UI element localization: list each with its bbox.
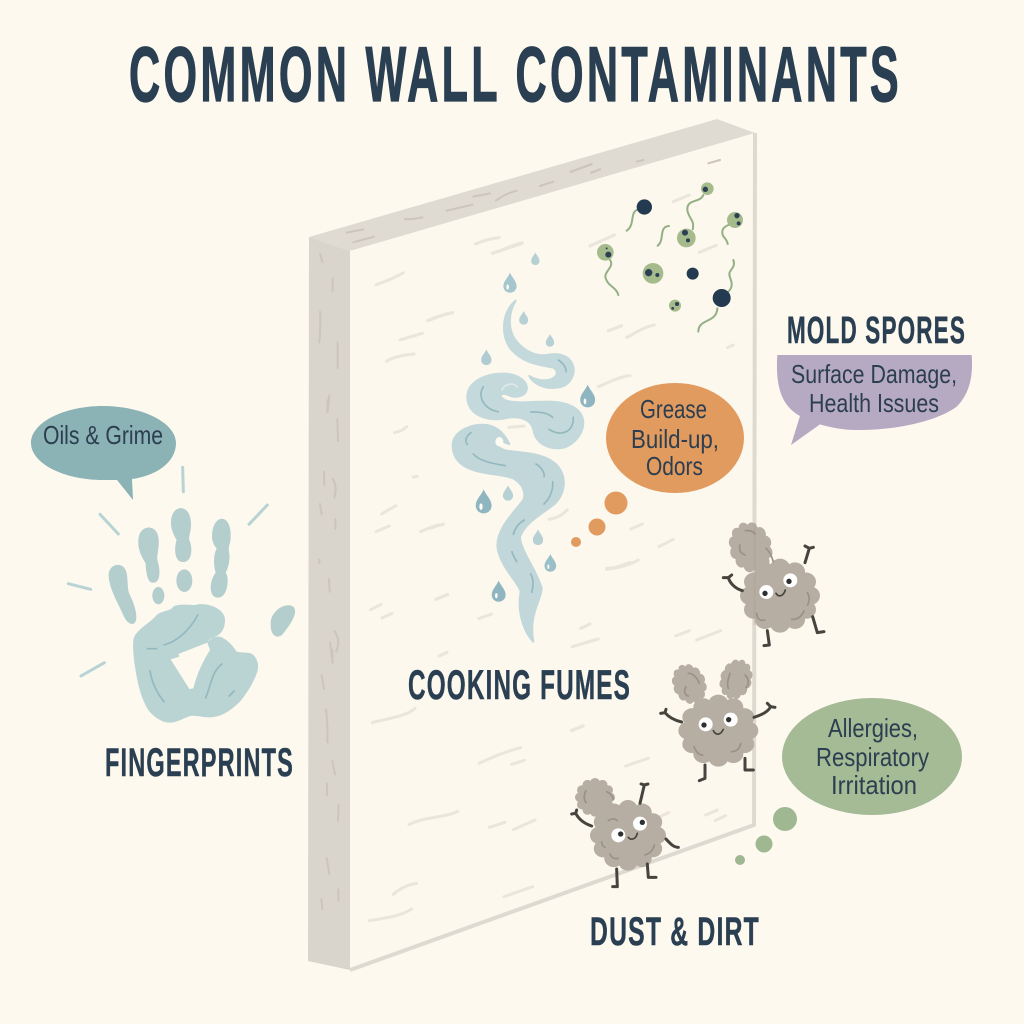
wall left side	[308, 237, 350, 970]
wall	[308, 119, 755, 970]
callout: grease	[571, 383, 744, 547]
callout: surface damage: Surface Damage,	[791, 359, 957, 389]
callout: allergies: Irritation	[831, 770, 917, 800]
wall top side	[309, 119, 755, 251]
callout: allergies: Allergies,	[828, 713, 918, 743]
wall front face	[350, 133, 755, 970]
callout: grease: Build-up,	[631, 424, 719, 454]
mold spores cluster	[597, 182, 743, 332]
dust character lower	[572, 778, 678, 887]
callout: surface damage: Health Issues	[809, 388, 939, 418]
callout: grease: Grease	[640, 394, 707, 424]
callout: grease: Odors	[646, 451, 703, 481]
callout: allergies	[735, 698, 962, 865]
heading: cooking fumes: COOKING FUMES	[408, 661, 631, 708]
callout: surface damage	[777, 355, 972, 445]
cooking fumes smoke	[453, 252, 595, 642]
callout: allergies: Respiratory	[816, 742, 929, 772]
dust character middle	[661, 654, 775, 781]
heading: dust and dirt: DUST & DIRT	[590, 910, 760, 954]
dust characters	[572, 516, 824, 887]
callout: oils and grime	[31, 406, 176, 500]
icon: handprint	[68, 467, 295, 723]
heading: fingerprints: FINGERPRINTS	[105, 741, 294, 785]
callout: oils and grime: Oils & Grime	[43, 420, 163, 450]
dust character upper	[722, 516, 824, 646]
